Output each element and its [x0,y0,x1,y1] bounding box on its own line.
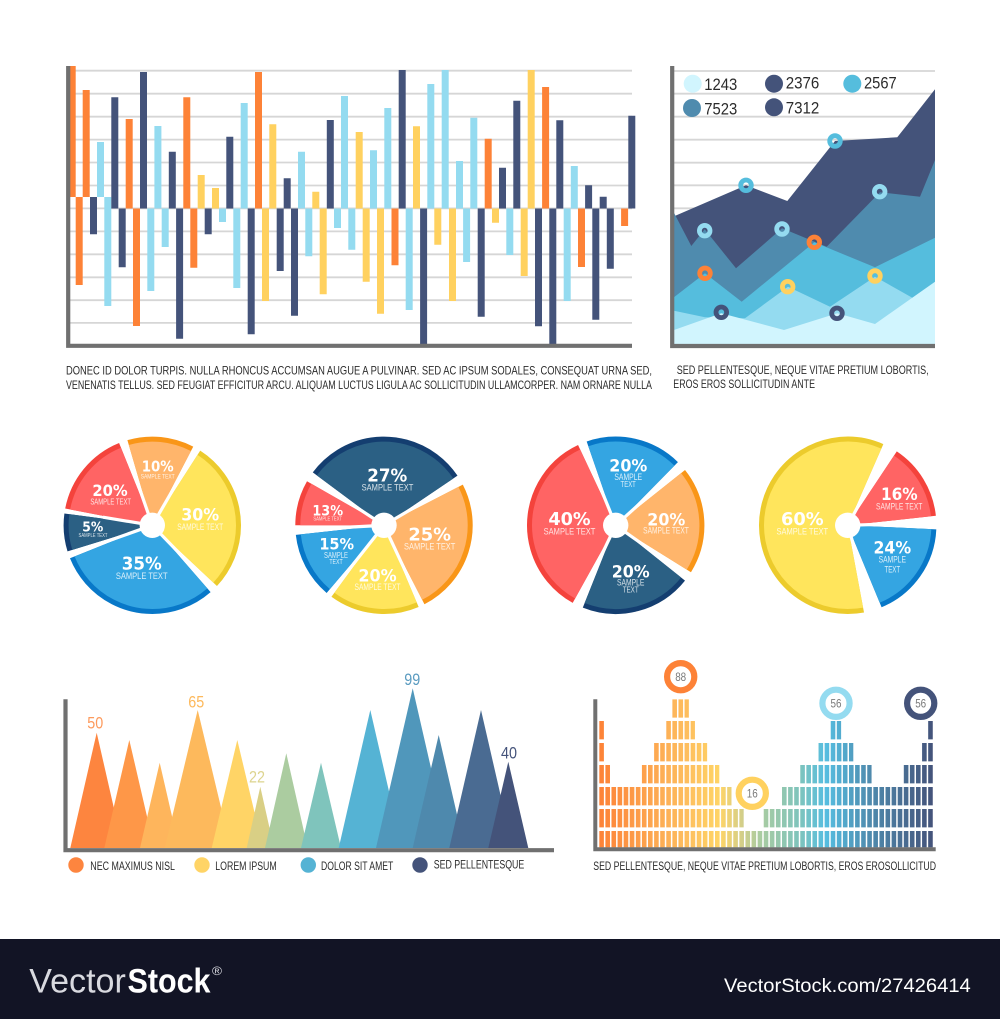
pie 1 labels: SAMPLE TEXT [116,571,168,581]
slice: 5% [97,470,208,581]
text block: area chart caption: EROS EROS SOLLICITUDIN ANTE [673,377,815,391]
pie 4 labels: 60% [781,509,824,530]
pie 4 labels: SAMPLE TEXT [776,526,829,536]
bars: navy [94,70,632,344]
pie 1 labels: 30% [181,506,219,526]
triangle chart legend: NEC MAXIMUS NISL [90,861,175,873]
footer band [0,939,1000,1019]
slice: 20% orange [553,463,678,588]
slice: 25% [324,466,444,585]
slice: 20% navy [553,463,678,588]
slice: 20% blue [559,469,672,582]
area chart legend: 2567 [864,75,897,93]
bars: orange [72,66,625,326]
triangle chart legend: LOREM IPSUM [215,861,277,873]
triangle value labels: 50 [87,713,103,732]
pie 4 labels [776,485,923,575]
bars: yellow [201,70,531,314]
pie 2 labels: 27% [367,466,407,487]
pie 3 labels: 20% [647,511,685,531]
badge: 56 light blue: 56 [830,697,842,711]
pie 2 labels: SAMPLE TEXT [404,541,456,551]
area layer: navy [675,89,935,344]
area layer: blue [673,238,935,344]
pie 1 labels: SAMPLE TEXT [141,474,175,481]
area chart legend: 7523 [704,100,737,118]
triangle value labels: 22 [249,767,265,786]
area layer: steel blue [672,160,935,344]
pie 3 labels: SAMPLE TEXT [643,525,689,535]
segmented columns [599,708,933,839]
area layer: pale blue [674,282,935,344]
badge: 56 navy [907,690,934,717]
slice: 15% [321,463,447,588]
pie 1 labels: SAMPLE TEXT [177,522,224,532]
pie 3 labels: SAMPLE [614,472,642,482]
pie 3 labels: TEXT [623,586,639,595]
pie 2 labels: 13% [312,504,343,520]
bar chart axes [68,66,632,346]
slice: 10% [97,470,207,580]
pie 4 labels: SAMPLE TEXT [876,501,923,511]
footer logo: ® [212,964,222,978]
text block: bar chart caption: DONEC ID DOLOR TURPIS. NULLA RHONCUS ACCUMSAN AUGUE A PULVINAR. SED AC IPSUM SODALES, CONSEQUAT URNA SED, [66,364,652,378]
slice: 13% [340,481,428,570]
badge: 88: 88 [675,670,686,684]
area chart legend [683,75,897,118]
slice: 60% [796,474,899,577]
badge: 88 [667,663,694,690]
bars: light blue [100,70,574,310]
pie 1 labels: SAMPLE TEXT [78,533,108,539]
footer image id: VectorStock.com/27426414 [724,975,971,997]
footer logo: Stock [128,962,211,1000]
pie 1 labels: 10% [142,458,174,476]
pie chart 3 [544,457,689,595]
footer logo: Vector [29,962,126,1000]
badge: 16 [739,780,766,807]
area chart legend: 1243 [704,76,737,94]
pie 2 labels: 15% [319,535,354,554]
pie 2 labels: SAMPLE TEXT [362,483,414,493]
triangle value labels: 40 [501,744,517,763]
area layer: light blue [674,277,935,344]
pie 4 labels: 24% [873,538,911,558]
slice: 40% [555,465,676,586]
badge: 56 navy: 56 [915,697,926,711]
pie 2 labels: TEXT [329,559,343,566]
badge: 16: 16 [747,787,758,801]
pie 2 labels [312,466,456,592]
panel: diverging bar chart [68,66,632,346]
pie 2 labels: SAMPLE TEXT [313,517,343,523]
triangle chart legend: SED PELLENTESQUE [434,859,525,871]
triangle chart legend [68,857,525,873]
triangle value labels: 99 [404,670,420,689]
pie chart 4 [776,464,923,587]
slice: 30% [91,464,214,587]
triangle value labels: 65 [188,692,204,711]
pie 3 labels: SAMPLE [617,578,644,588]
pie 1 labels: 35% [122,554,162,575]
pie 2 labels: 25% [408,524,451,545]
column chart axes [595,699,936,849]
triangle chart legend: DOLOR SIT AMET [321,861,393,873]
pie 3 labels: 20% [609,457,647,477]
text block: area chart caption [673,363,929,391]
pie 2 labels: 20% [358,566,397,586]
pie 3 labels: TEXT [621,480,636,489]
area chart legend: 2376 [786,75,819,93]
slice: 20% [100,473,204,577]
triangle chart axes [66,699,554,850]
pie 1 labels [78,458,224,581]
badge: 56 light blue [822,690,850,717]
pie chart 2 [312,463,456,592]
pie 4 labels: SAMPLE [879,554,906,564]
slice: 20% [326,467,442,583]
slice: 24% [801,479,894,572]
pie 3 labels: 40% [548,509,591,530]
panel: triangle peak chart [66,670,554,873]
text block: bar chart caption: VENENATIS TELLUS. SED FEUGIAT EFFICITUR ARCU. ALIQUAM LUCTUS LIGULA AC SOLLICITUDIN ULLAMCORPER. NAM ORNARE NULLA [66,378,652,392]
data point rings [699,136,885,319]
area chart axes [672,66,935,346]
slice: 27% [322,463,446,587]
pie 4 labels: TEXT [884,565,900,575]
pie 3 labels [544,457,689,595]
pie chart 1 [78,458,224,588]
pie 1 labels: 20% [92,481,128,500]
slice: 16% [786,464,909,587]
pie 1 labels: SAMPLE TEXT [90,497,131,506]
pie 2 labels: SAMPLE [324,551,348,560]
pie 3 labels: 20% [612,562,650,582]
slice: 35% [90,463,215,588]
pie 4 labels: 16% [881,485,918,505]
triangles [70,688,528,848]
panel: segmented column chart [595,663,936,849]
pie 3 labels: SAMPLE TEXT [544,526,596,536]
pie 2 labels: SAMPLE TEXT [354,582,401,592]
footer logo [29,962,222,1000]
triangle value labels [87,670,517,786]
panel: area chart [672,66,935,346]
pie 1 labels: 5% [82,521,103,536]
text block: bar chart caption [66,364,652,392]
area chart legend: 7312 [786,99,819,117]
